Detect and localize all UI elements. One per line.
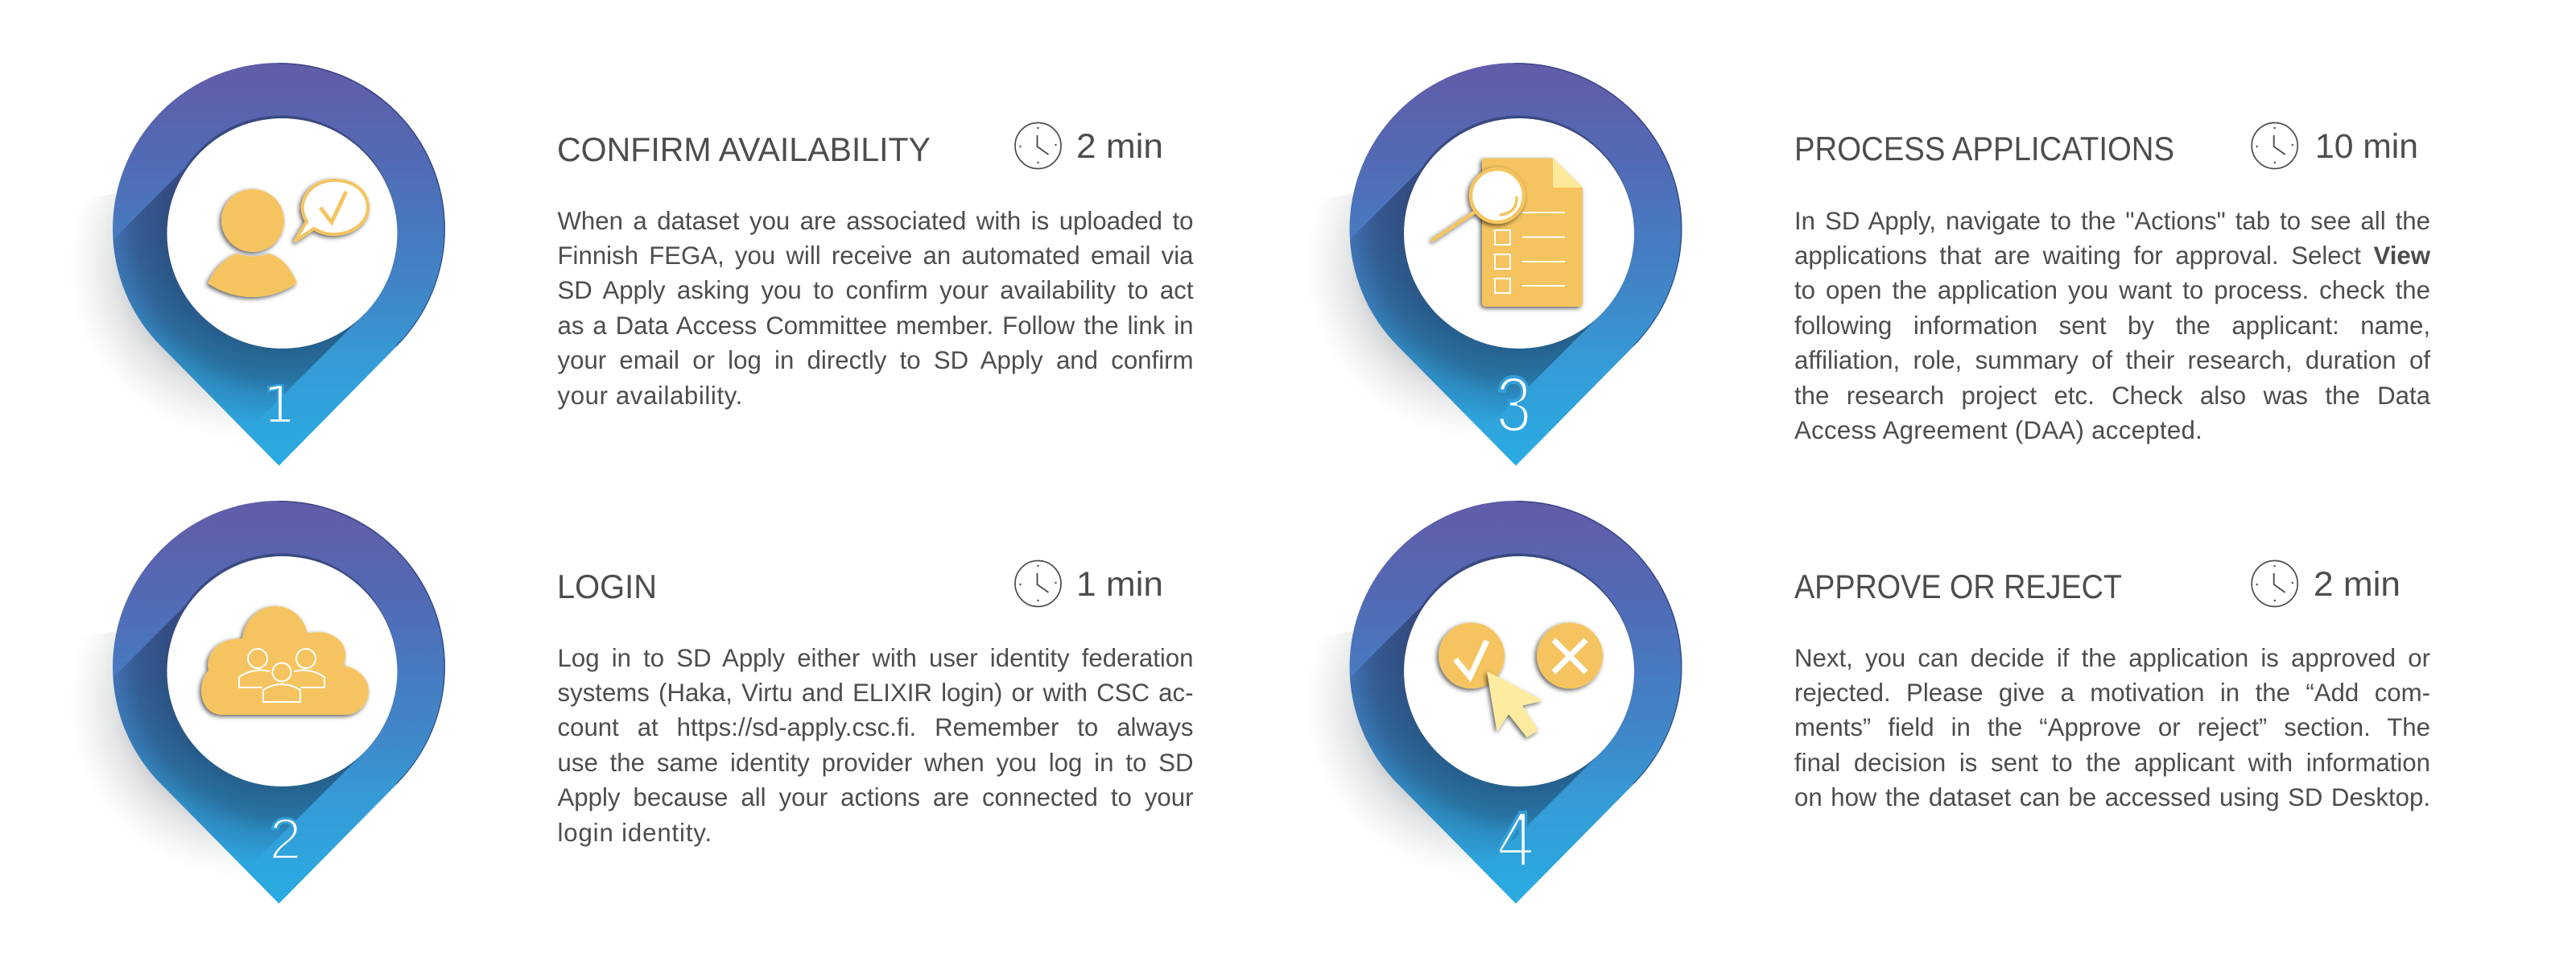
body text: SD Apply asking you to confirm your availability to act bbox=[557, 276, 1193, 304]
heading: CONFIRM AVAILABILITY bbox=[557, 130, 931, 168]
body text: In SD Apply, navigate to the "Actions" tab to see all the bbox=[1794, 207, 2430, 235]
number 1: 1 bbox=[263, 376, 295, 436]
body text bbox=[557, 207, 1193, 410]
icon: cloud with people bbox=[201, 606, 369, 715]
body text: final decision is sent to the applicant with information bbox=[1794, 749, 2430, 777]
body text: on how the dataset can be accessed using SD Desktop. bbox=[1794, 783, 2430, 811]
panel: step 3 process applications bbox=[1321, 63, 2431, 465]
body text: the research project etc. Check also was the Data bbox=[1794, 382, 2430, 410]
panel: step 1 confirm availability bbox=[84, 63, 1193, 465]
body text bbox=[1794, 207, 2431, 444]
step 3 graphics bbox=[1321, 63, 2418, 465]
body text: your email or log in directly to SD Apply and confirm bbox=[557, 346, 1193, 374]
body text: your availability. bbox=[557, 382, 743, 410]
body text: affiliation, role, summary of their research, duration of bbox=[1794, 346, 2430, 374]
duration: 1 min bbox=[1076, 565, 1163, 604]
body text: Finnish FEGA, you will receive an automated email via bbox=[557, 242, 1193, 270]
body text: Apply because all your actions are connected to your bbox=[557, 783, 1193, 811]
icon: clock bbox=[2252, 122, 2297, 169]
body text: following information sent by the applicant: name, bbox=[1794, 312, 2430, 340]
body text: rejected. Please give a motivation in the “Add com- bbox=[1794, 679, 2430, 707]
heading: APPROVE OR REJECT bbox=[1794, 568, 2122, 605]
body text: systems (Haka, Virtu and ELIXIR login) or with CSC ac- bbox=[557, 679, 1193, 707]
icon: clock bbox=[1015, 122, 1061, 169]
icon: approve, reject and cursor bbox=[1439, 623, 1603, 737]
step 2 graphics bbox=[84, 501, 1163, 903]
body text: use the same identity provider when you log in to SD bbox=[557, 749, 1193, 777]
body text: Access Agreement (DAA) accepted. bbox=[1794, 416, 2202, 444]
pin 4 bbox=[1277, 501, 1682, 914]
body text: ments” field in the “Approve or reject” section. The bbox=[1794, 713, 2430, 741]
body text: applications that are waiting for approval. Select View bbox=[1794, 242, 2430, 270]
duration: 2 min bbox=[2314, 565, 2401, 604]
icon: document with magnifier bbox=[1433, 158, 1583, 307]
step 4 graphics bbox=[1321, 501, 2401, 903]
duration: 2 min bbox=[1076, 127, 1163, 166]
panel: step 2 login bbox=[84, 501, 1193, 903]
body text: When a dataset you are associated with is uploaded to bbox=[557, 207, 1193, 235]
icon: clock bbox=[2252, 560, 2297, 607]
icon: person with speech bubble bbox=[208, 180, 368, 297]
body text bbox=[557, 644, 1193, 847]
pin 1 bbox=[39, 63, 445, 476]
body text: Log in to SD Apply either with user identity federation bbox=[557, 644, 1193, 672]
body text: count at https://sd-apply.csc.fi. Remember to always bbox=[557, 713, 1193, 741]
step 1 graphics bbox=[84, 63, 1163, 465]
pin 2 bbox=[39, 501, 445, 914]
heading: PROCESS APPLICATIONS bbox=[1794, 130, 2174, 167]
number 4: 4 bbox=[1497, 795, 1534, 883]
body text bbox=[1794, 644, 2430, 811]
number 2: 2 bbox=[269, 807, 302, 872]
body text: Next, you can decide if the application is approved or bbox=[1794, 644, 2430, 672]
duration: 10 min bbox=[2315, 127, 2418, 166]
body text: as a Data Access Committee member. Follow the link in bbox=[557, 312, 1193, 340]
number 3: 3 bbox=[1496, 361, 1531, 448]
heading: LOGIN bbox=[557, 568, 657, 605]
icon: clock bbox=[1015, 560, 1061, 607]
body text: to open the application you want to process. check the bbox=[1794, 276, 2430, 304]
body text: login identity. bbox=[557, 819, 712, 847]
pin 3 bbox=[1277, 63, 1682, 476]
panel: step 4 approve or reject bbox=[1321, 501, 2430, 903]
